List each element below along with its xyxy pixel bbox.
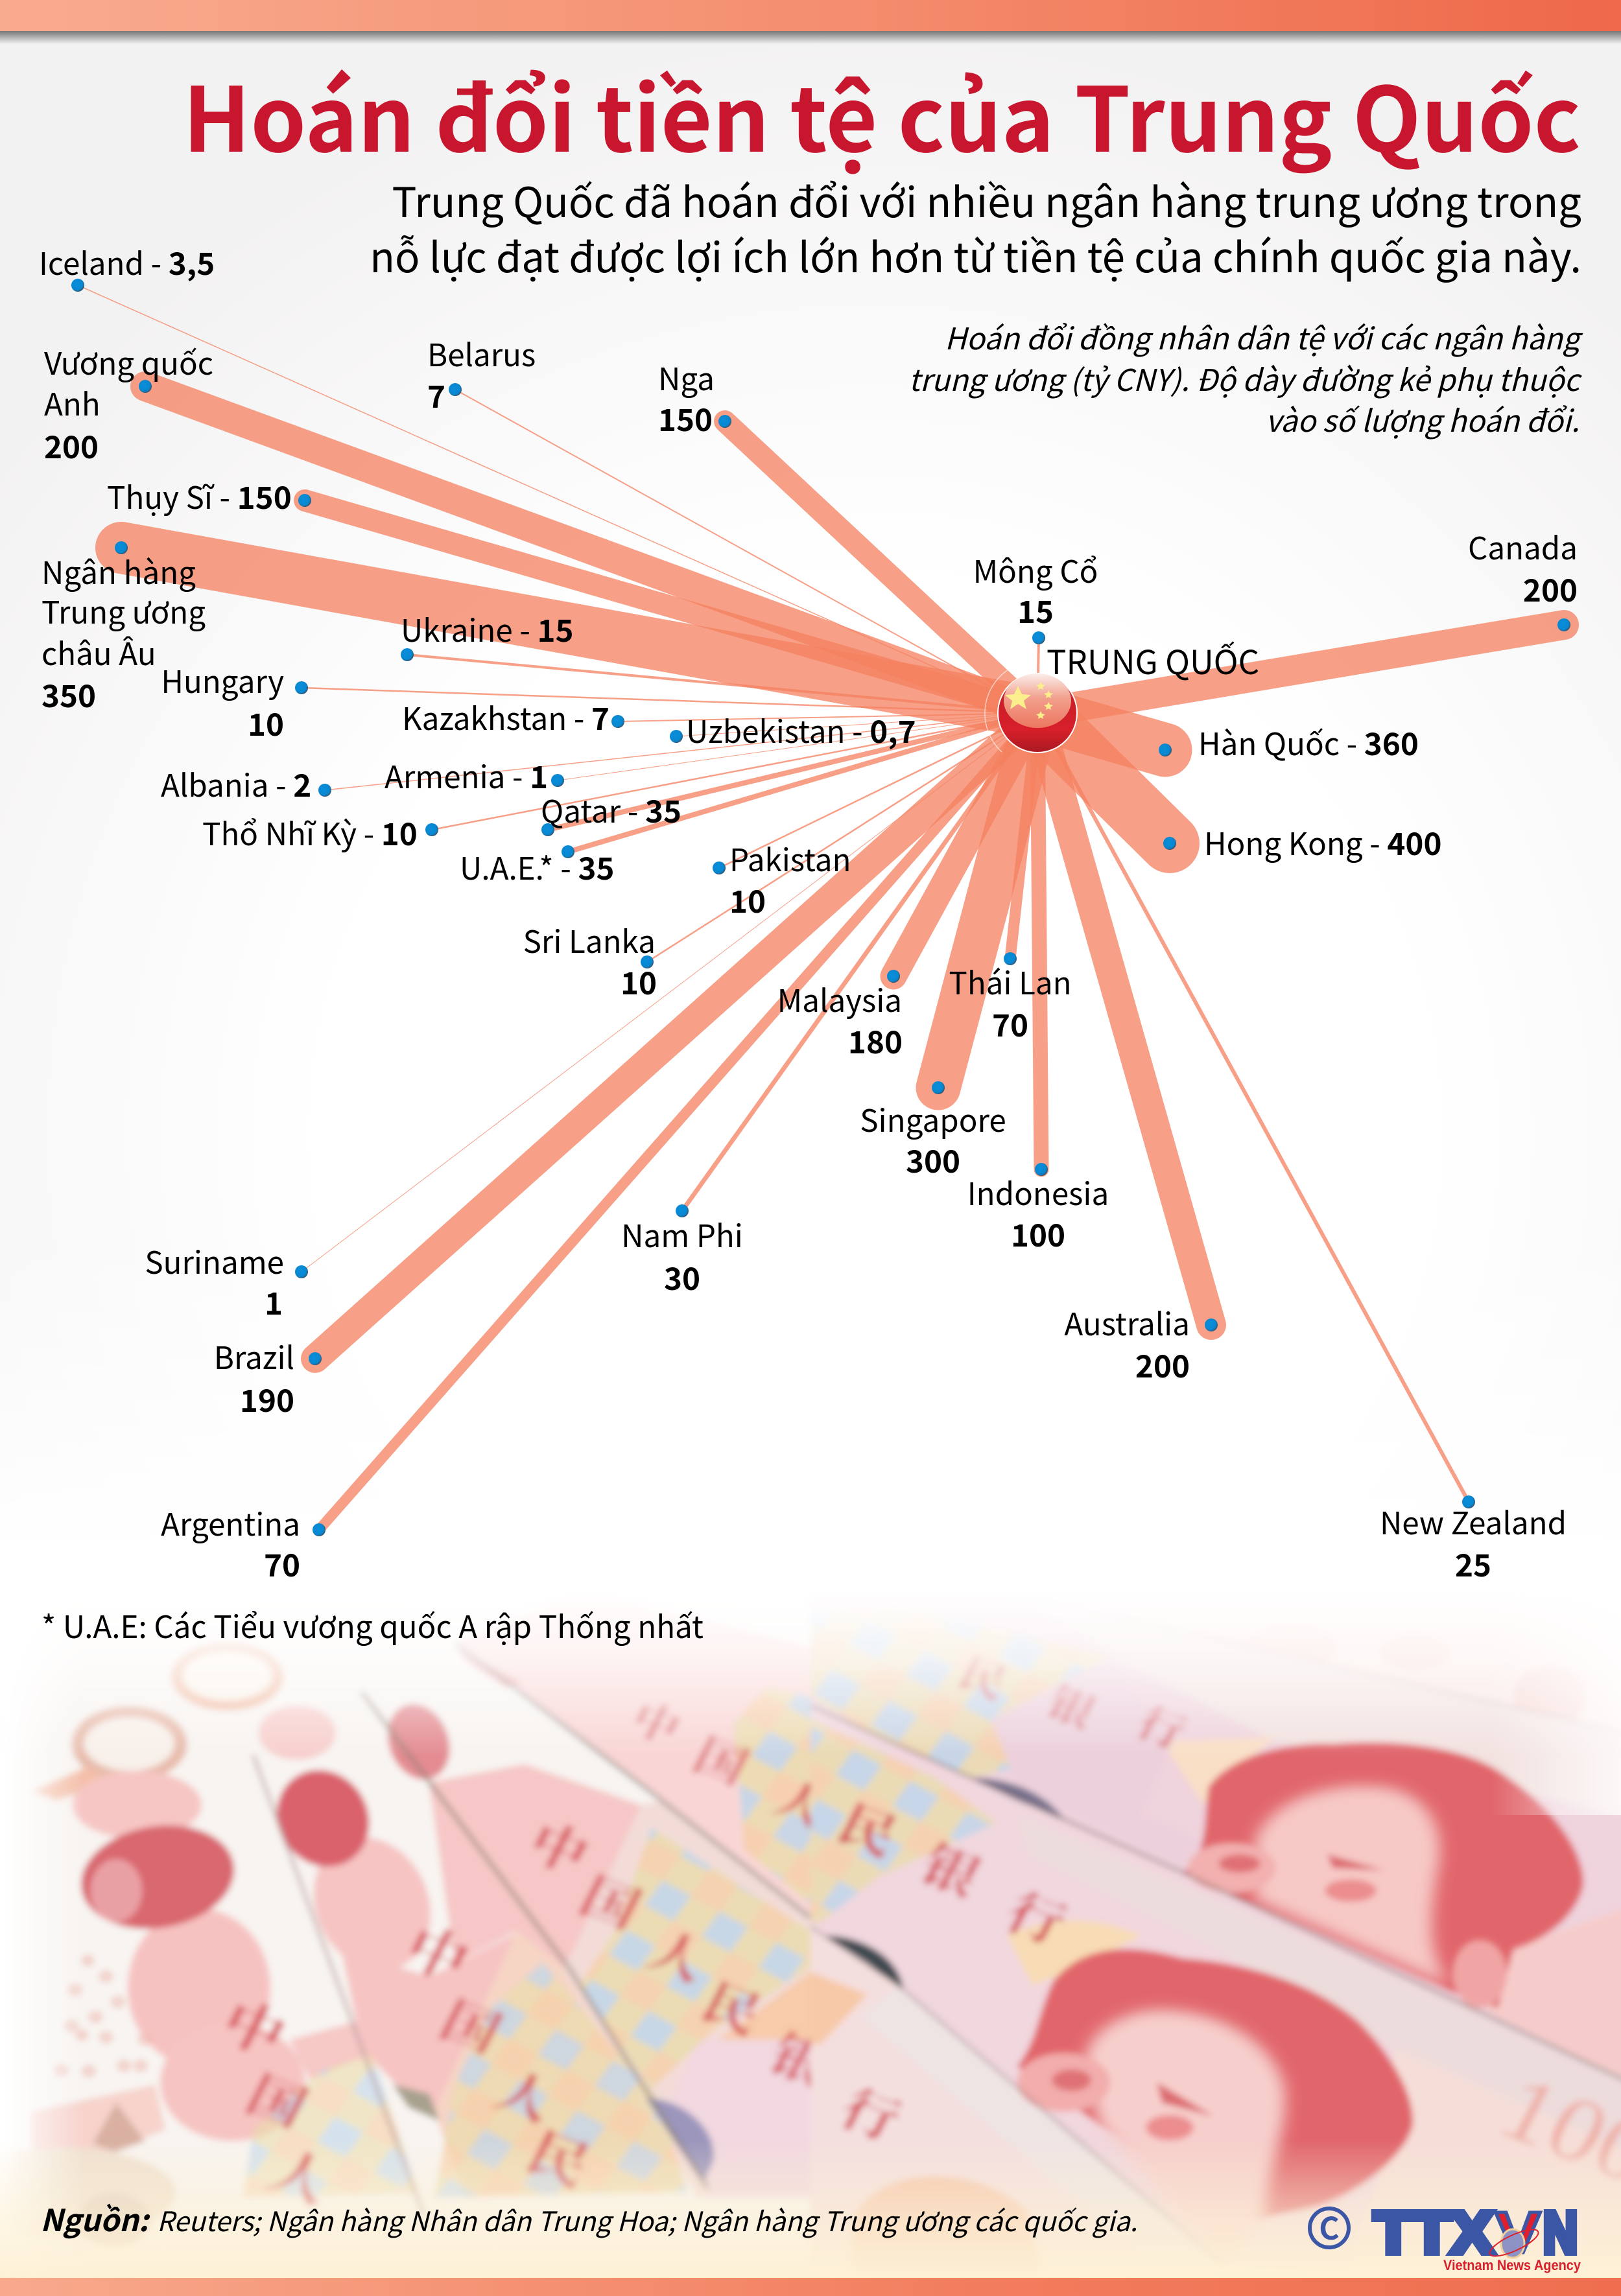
label: Brazil: 190 (240, 1376, 294, 1421)
label: ECB: châu Âu (41, 629, 156, 674)
line: Argentina (319, 713, 1037, 1530)
line: Kazakhstan (618, 713, 1037, 721)
label: Mongolia: 15 (1017, 587, 1054, 632)
line: United Kingdom (145, 386, 1037, 713)
line: Australia (1037, 713, 1211, 1325)
icon: China flag ball (985, 668, 1077, 753)
line: Singapore (938, 713, 1037, 1088)
line: Indonesia (1037, 713, 1041, 1169)
right half of the notes (810, 1584, 1621, 2296)
banknote characters: 国 (430, 1980, 515, 2067)
banknote characters: 国 (684, 1720, 761, 1797)
label: Malaysia: 180 (848, 1018, 903, 1062)
line: Qatar (548, 713, 1037, 830)
line: Albania (325, 713, 1037, 790)
label: Ukraine: Ukraine - 15 (401, 606, 574, 651)
right half of the notes: 民 (950, 1641, 1019, 1711)
label: United Kingdom: 200 (44, 423, 99, 467)
right half of the notes: 行 (829, 2068, 915, 2154)
chart note: Hoán đổi đồng nhân dân tệ với các ngân hàng (945, 315, 1583, 358)
line: Brazil (315, 713, 1037, 1359)
label: Thailand: Thái Lan (949, 959, 1072, 1003)
label: Armenia: Armenia - 1 (385, 753, 548, 797)
logo wordmark (1374, 2201, 1578, 2266)
label: Belarus: 7 (427, 372, 445, 417)
label: Pakistan: Pakistan (729, 836, 851, 880)
footnote: * U.A.E: Các Tiểu vương quốc A rập Thống nhất (41, 1602, 704, 1647)
dark coin fragments (971, 1777, 1064, 1818)
pink column note 0 (73, 1771, 202, 1839)
line: Switzerland (305, 500, 1037, 713)
label: Russia: 150 (658, 395, 713, 440)
bottom bar (0, 2278, 1621, 2296)
portrait 2 (1017, 1949, 1413, 2220)
line: Iceland (78, 285, 1037, 713)
label: Suriname: 1 (265, 1279, 283, 1324)
banknote characters (210, 1685, 844, 2220)
label: Australia: 200 (1135, 1342, 1190, 1387)
line: Turkey (432, 713, 1037, 830)
left half of the notes (0, 1588, 844, 2247)
swap lines chart (78, 285, 1564, 1530)
banknote characters: 中 (210, 1980, 302, 2071)
subtitle: Trung Quốc đã hoán đổi với nhiều ngân hàng trung ương trong (392, 170, 1581, 229)
label: Singapore: 300 (906, 1137, 960, 1182)
line: New Zealand (1037, 713, 1469, 1502)
label: Kazakhstan: Kazakhstan - 7 (402, 694, 609, 739)
banknote characters: 中 (622, 1685, 692, 1755)
label: Sri Lanka: 10 (621, 959, 657, 1003)
banknote characters: 中 (518, 1802, 603, 1888)
label: Albania: Albania - 2 (161, 761, 311, 806)
label: Singapore: Singapore (860, 1096, 1006, 1141)
line: Belarus (455, 390, 1037, 713)
agency name: Vietnam News Agency (1443, 2257, 1581, 2273)
bottom left ornament (93, 2103, 145, 2152)
creases (254, 1755, 424, 2216)
label: Canada: Canada (1468, 524, 1578, 568)
label: Belarus: Belarus (427, 331, 536, 375)
photo fades (0, 1543, 1621, 2282)
label: South Korea: Hàn Quốc - 360 (1198, 720, 1419, 764)
label: New Zealand: 25 (1455, 1541, 1491, 1586)
right half of the notes: 行 (1128, 1690, 1198, 1760)
right half of the notes: 行 (995, 1872, 1080, 1958)
line: Armenia (558, 713, 1037, 780)
banknote characters: 人 (484, 2050, 570, 2136)
line: Hungary (302, 688, 1037, 713)
label: Indonesia: Indonesia (967, 1169, 1109, 1214)
label: Switzerland: Thụy Sĩ - 150 (107, 473, 292, 518)
line: Uzbekistan (676, 713, 1037, 736)
label: Australia: Australia (1064, 1300, 1190, 1344)
logo wordmark: V (1495, 2201, 1541, 2266)
chart note: vào số lượng hoán đổi. (1266, 397, 1580, 441)
dots (56, 1957, 149, 2075)
creases (810, 1705, 1621, 2098)
banknote characters: 银 (758, 2014, 844, 2100)
right half of the notes: 银 (1037, 1670, 1107, 1740)
line: Russia (725, 421, 1037, 713)
label: Argentina: Argentina (161, 1500, 300, 1545)
label: Indonesia: 100 (1011, 1211, 1065, 1256)
label: Malaysia: Malaysia (777, 976, 902, 1021)
label: New Zealand: New Zealand (1380, 1499, 1567, 1543)
note 2 (429, 1764, 661, 1967)
source: Reuters; Ngân hàng Nhân dân Trung Hoa; Ngân hàng Trung ương các quốc gia. (157, 2201, 1137, 2240)
pink column note 1 (259, 1705, 336, 1760)
label: Hungary: Hungary (161, 657, 284, 702)
label: Uzbekistan: Uzbekistan - 0,7 (686, 707, 916, 752)
line: Hong Kong (1037, 713, 1170, 843)
line: Thailand (1010, 713, 1037, 959)
label: Brazil: Brazil (214, 1333, 294, 1378)
colour blocks (243, 2053, 419, 2197)
banknote photo (0, 1543, 1621, 2296)
label: Argentina: 70 (264, 1541, 300, 1586)
line: Pakistan (719, 713, 1037, 868)
title: Hoán đổi tiền tệ của Trung Quốc (183, 48, 1581, 178)
label: United Kingdom: Vương quốc (44, 339, 213, 384)
emblems (69, 1812, 247, 1943)
label: Pakistan: 10 (729, 877, 766, 922)
label: Iceland: Iceland - 3,5 (39, 239, 215, 284)
country dots (71, 279, 1570, 1536)
label: UAE: U.A.E.* - 35 (460, 844, 615, 889)
chart note: trung ương (tỷ CNY). Độ dày đường kẻ phụ thuộc (908, 357, 1582, 400)
label: Turkey: Thổ Nhĩ Kỳ - 10 (202, 810, 418, 854)
banknote characters: 民 (515, 2111, 606, 2202)
note 3 (810, 1705, 1621, 2296)
note 2 (810, 1927, 1224, 2296)
label: South Africa: 30 (664, 1254, 700, 1299)
label: ECB: Ngân hàng (41, 548, 196, 593)
label: Mongolia: Mông Cổ (973, 547, 1098, 592)
label: Canada: 200 (1523, 566, 1578, 611)
line: UAE (568, 713, 1037, 852)
icon: copyright (1310, 2203, 1349, 2249)
note 4 (810, 1588, 1621, 2098)
label: United Kingdom: Anh (44, 380, 101, 425)
banknote characters: 民 (691, 1962, 776, 2048)
portrait 1 (1183, 1742, 1583, 2008)
label: Hungary: 10 (248, 700, 284, 745)
dark coin (646, 2098, 714, 2184)
glasses-like rings (31, 1647, 278, 1800)
line: Malaysia (893, 713, 1037, 976)
label: South Africa: Nam Phi (621, 1212, 743, 1256)
banknote characters: 国 (236, 2055, 322, 2140)
source: Nguồn: (40, 2197, 150, 2240)
line: South Korea (1037, 713, 1165, 750)
banknote characters: 中 (394, 1905, 485, 1997)
label: Thailand: 70 (992, 1001, 1028, 1046)
label: ECB: Trung ương (41, 588, 206, 633)
label: Qatar: Qatar - 35 (541, 787, 681, 832)
banknote characters: 国 (569, 1857, 655, 1942)
label: Sri Lanka: Sri Lanka (523, 917, 656, 962)
line: Canada (1037, 625, 1564, 713)
label: Russia: Nga (658, 355, 715, 399)
logo wordmark: TTX (1374, 2201, 1493, 2266)
banknote characters: 人 (637, 1910, 722, 1997)
line: South Africa (682, 713, 1037, 1211)
banknote characters: 人 (256, 2128, 348, 2220)
top bar (0, 0, 1621, 44)
logo: TTXVN (1310, 2201, 1581, 2273)
note 3 top (455, 1588, 810, 1913)
right half of the notes: 银 (910, 1825, 995, 1910)
subtitle: nỗ lực đạt được lợi ích lớn hơn từ tiền tệ của chính quốc gia này. (370, 225, 1581, 285)
icon: copyright: C (1319, 2203, 1340, 2249)
line: Suriname (302, 713, 1037, 1272)
label: Hong Kong: Hong Kong - 400 (1204, 819, 1441, 864)
label: China: TRUNG QUỐC (1047, 636, 1259, 684)
banknote characters: 人 (764, 1763, 841, 1840)
banknote characters: 民 (827, 1784, 912, 1870)
label: Suriname: Suriname (145, 1238, 284, 1283)
icon: globe (1487, 2225, 1541, 2261)
line: ECB (121, 548, 1037, 713)
note 5, top right (1017, 1584, 1621, 1742)
label: ECB: 350 (41, 672, 96, 716)
line: Sri Lanka (647, 713, 1037, 962)
line: Mongolia (1037, 638, 1039, 713)
line: Ukraine (407, 655, 1037, 713)
logo wordmark: N (1543, 2201, 1578, 2266)
